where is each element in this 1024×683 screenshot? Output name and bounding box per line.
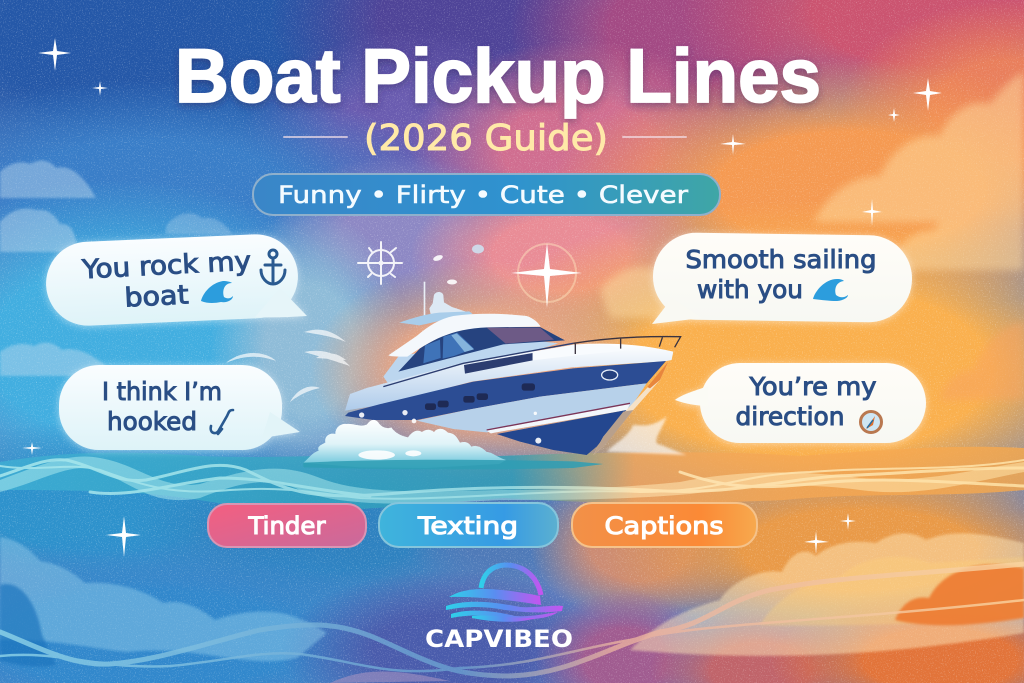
boat: dark hull stripe: [345, 361, 666, 420]
boat: mast and radar: [424, 282, 425, 318]
logo mark: [446, 565, 563, 622]
logo: Capvibeo: CAPVIBEO: [425, 625, 573, 653]
water spray: [303, 410, 687, 469]
boat: [345, 282, 681, 455]
button: Texting: Texting: [417, 512, 518, 540]
icon: anchor: [261, 250, 285, 284]
boat: lower hull: [417, 383, 647, 432]
category pill: [253, 174, 720, 215]
speech bubble: Smooth sailing with you: [652, 232, 913, 324]
clouds: [0, 72, 1024, 400]
logo: Capvibeo: [425, 565, 573, 653]
sparkle stars: [22, 38, 942, 557]
icon: wave: [813, 279, 848, 301]
icon: compass rose sparkle: [511, 243, 582, 308]
boat: cabin roof: [388, 314, 541, 357]
icon: ship wheel: [358, 242, 402, 284]
speech bubble: I think I'm hooked: I think I’m: [102, 377, 222, 406]
icon: wave: [201, 281, 233, 303]
speech bubble: Smooth sailing with you: with you: [697, 275, 803, 304]
icon: fish hook: [211, 410, 233, 434]
speech bubble: You're my direction: [675, 363, 926, 443]
speech bubble: I think I'm hooked: hooked: [107, 407, 197, 436]
button: Tinder: Tinder: [247, 512, 326, 540]
title: Boat Pickup Lines: [175, 34, 821, 119]
boat: portholes: [425, 370, 618, 410]
lower clouds: [0, 533, 1024, 667]
boat: bow stem: [593, 362, 668, 455]
button: Captions: Captions: [604, 512, 724, 540]
boat: upper hull: [345, 344, 673, 411]
boat: windows: [398, 327, 565, 372]
boat: flybridge wing: [399, 311, 473, 325]
icon: compass: [860, 412, 882, 432]
boat: cabin body: [383, 337, 558, 388]
subtitle: (2026 Guide): [364, 118, 608, 159]
speech bubble: I think I'm hooked: [59, 365, 300, 450]
speech bubble: You're my direction: direction: [736, 402, 844, 431]
sea horizon waves: [0, 447, 1024, 683]
speech bubble: You're my direction: You’re my: [748, 372, 877, 401]
category pill: Funny • Flirty • Cute • Clever: [278, 181, 688, 209]
button: Texting: [379, 503, 558, 547]
boat: railing: [573, 337, 681, 354]
speech bubble: You rock my boat: You rock my: [80, 247, 252, 285]
button: Captions: [572, 503, 757, 547]
button: Tinder: [208, 504, 366, 547]
wave ribbons: [0, 457, 1024, 504]
speech bubble: You rock my boat: [44, 233, 307, 327]
speech bubble: You rock my boat: boat: [124, 280, 189, 314]
speech bubble: Smooth sailing with you: Smooth sailing: [686, 245, 876, 274]
spray droplets: [226, 244, 484, 402]
